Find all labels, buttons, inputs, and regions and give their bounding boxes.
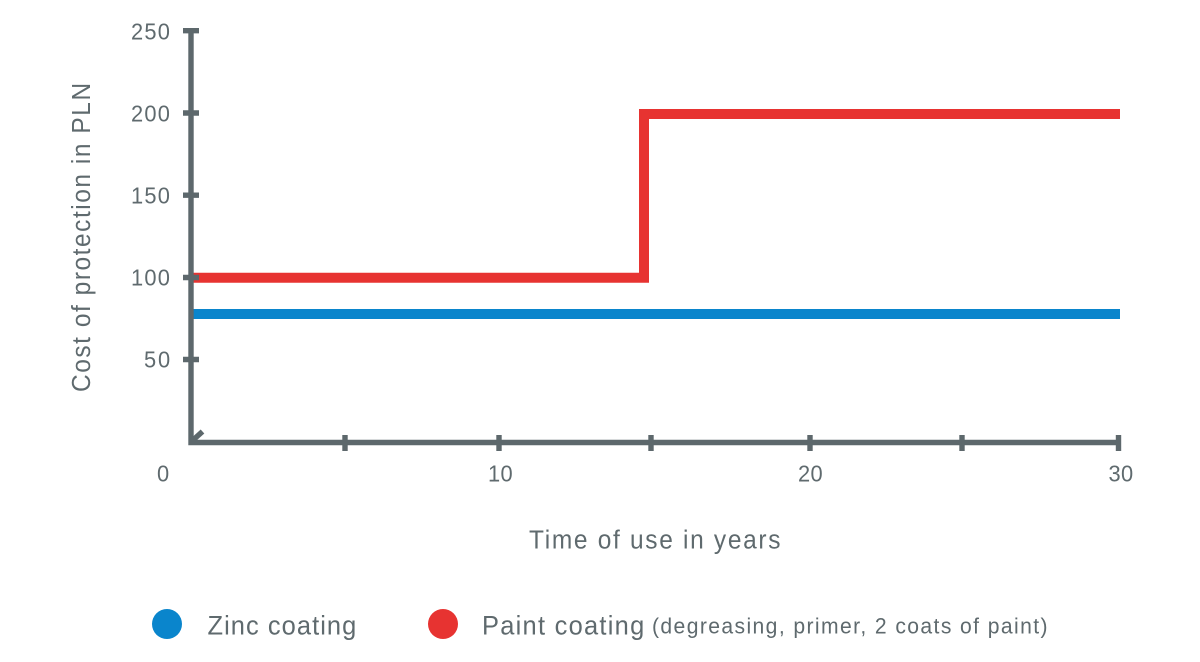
x axis tick labels: 10 xyxy=(488,461,513,487)
legend: paint coating: Paint coating xyxy=(482,610,644,640)
y axis tick labels: 100 xyxy=(131,265,170,291)
y axis tick labels: 150 xyxy=(131,183,170,209)
y axis tick labels xyxy=(131,19,170,373)
x axis title: Time of use in years xyxy=(529,526,781,554)
series: zinc coating xyxy=(193,309,1120,319)
x axis tick labels: 0 xyxy=(157,461,169,487)
series: paint coating xyxy=(193,114,1120,278)
x axis tick labels xyxy=(157,461,1133,487)
axes with tick marks xyxy=(183,28,1119,451)
legend: zinc coating: Zinc coating xyxy=(208,610,356,640)
x axis tick labels: 30 xyxy=(1108,461,1133,487)
legend: paint coating xyxy=(428,609,1048,640)
y axis tick labels: 200 xyxy=(131,101,170,127)
legend: paint coating: (degreasing, primer, 2 coats of paint) xyxy=(652,613,1048,639)
y axis tick labels: 250 xyxy=(131,19,170,45)
y axis tick labels: 50 xyxy=(144,347,170,373)
y axis title: Cost of protection in PLN xyxy=(68,83,96,392)
x axis tick labels: 20 xyxy=(798,461,823,487)
